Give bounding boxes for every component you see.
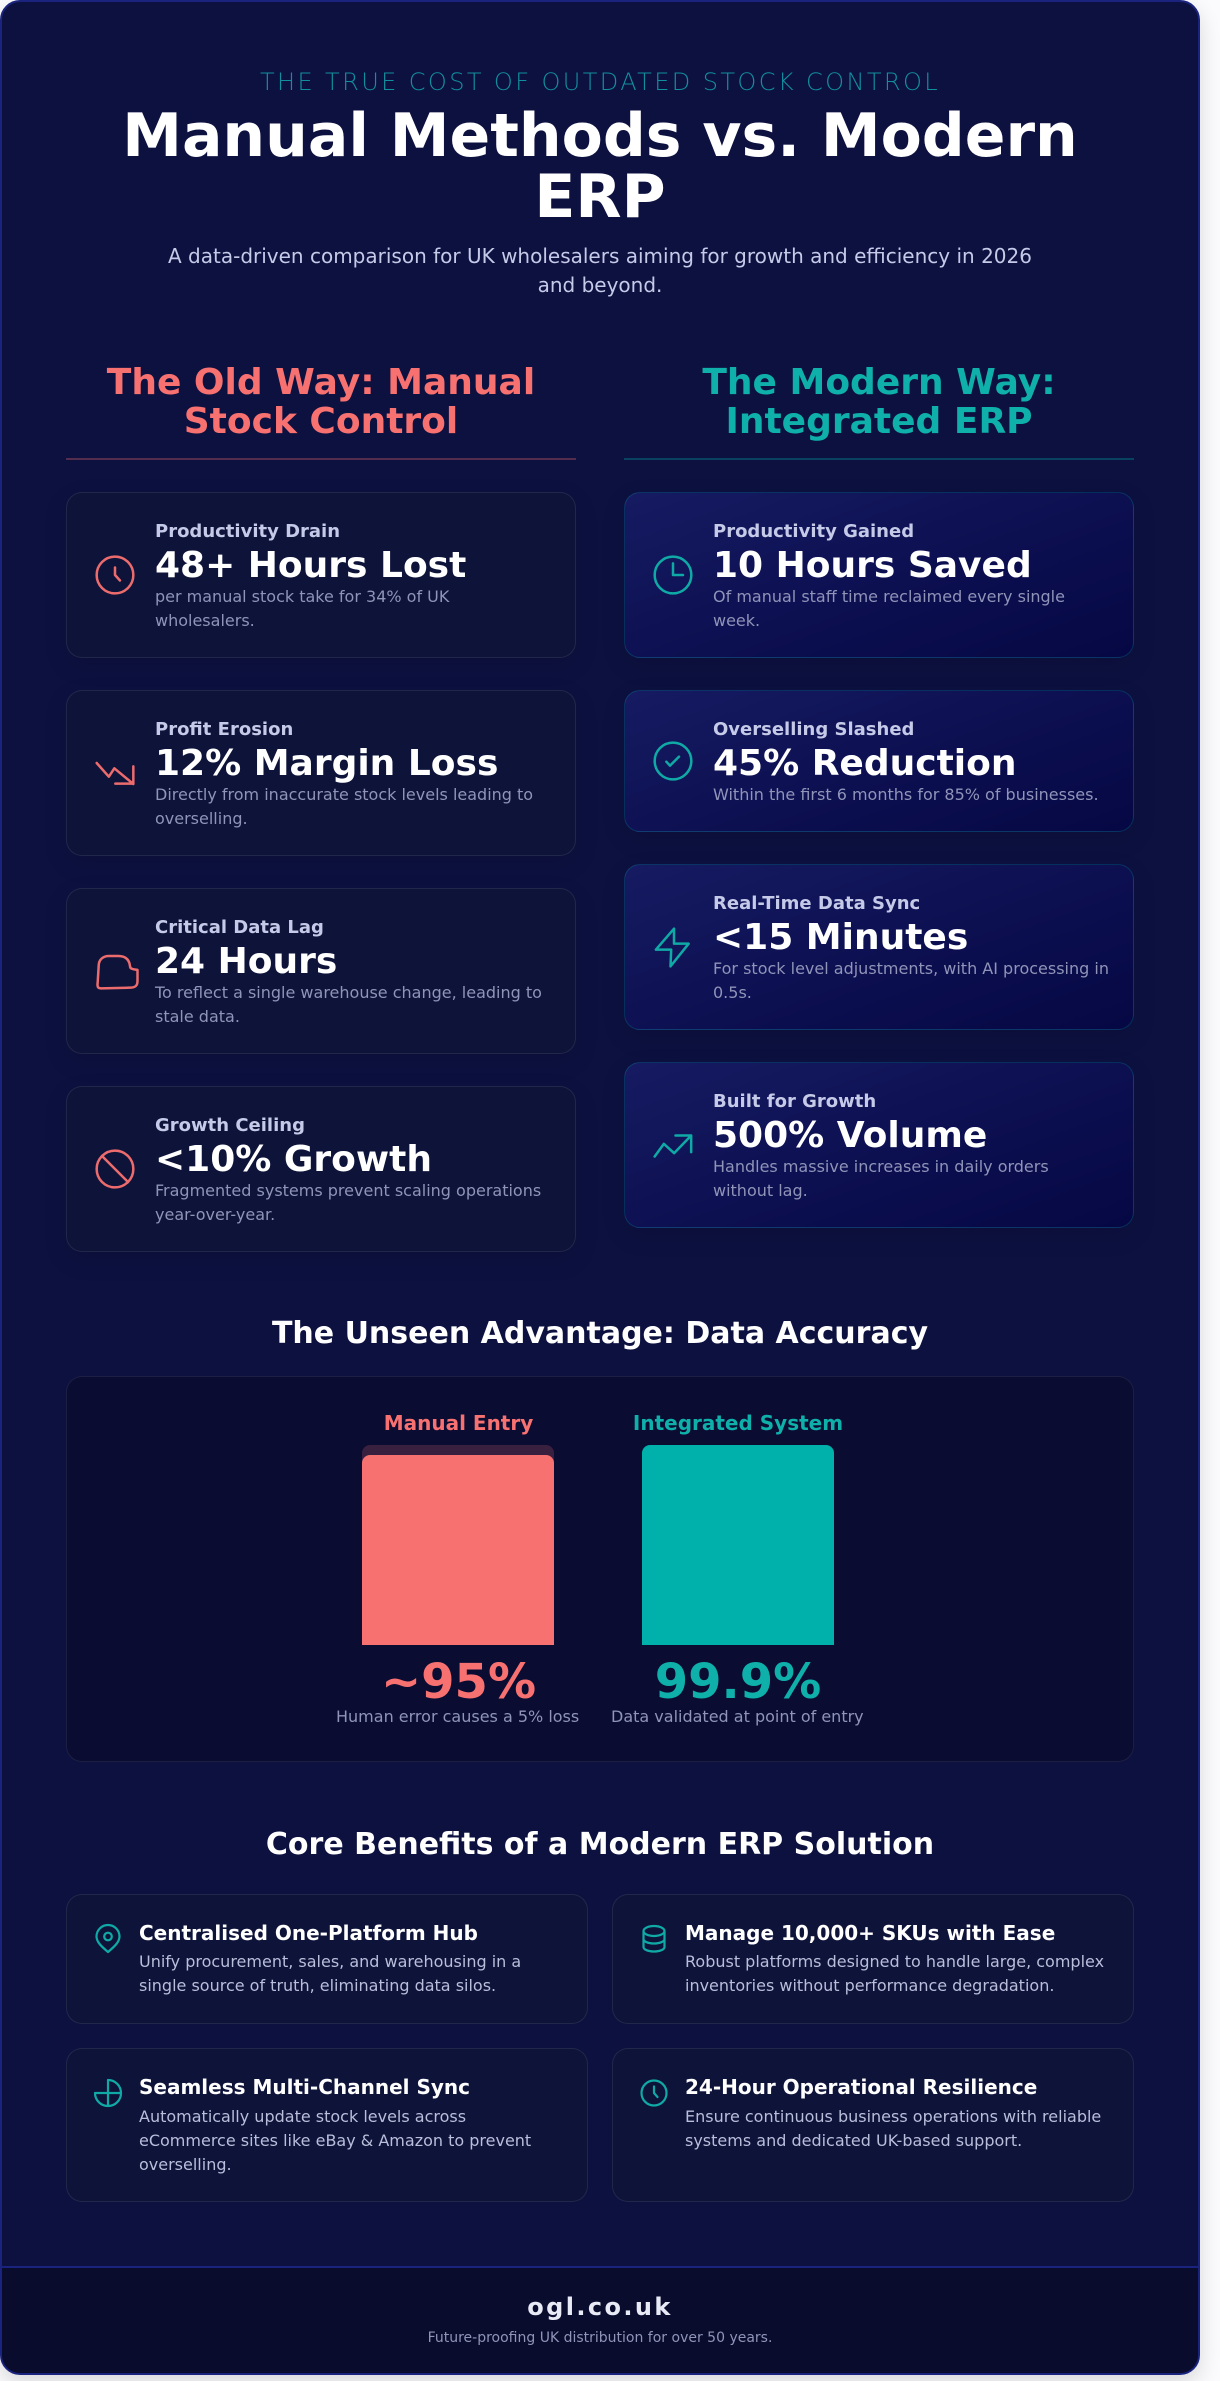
label: Growth Ceiling: [155, 1115, 305, 1136]
section heading: data accuracy: The Unseen Advantage: Data Accuracy: [272, 1316, 928, 1351]
value: 12% Margin Loss: [155, 743, 498, 784]
bar fill: manual entry: [362, 1455, 554, 1645]
label: Real-Time Data Sync: [713, 893, 920, 914]
description: [713, 959, 1109, 1002]
bar: integrated system: [642, 1445, 834, 1645]
benefit description: Unify procurement, sales, and warehousing in a: [139, 1952, 521, 1971]
panel: data accuracy chart: [66, 1376, 1134, 1762]
benefit description: Ensure continuous business operations with reliable: [685, 2107, 1101, 2126]
description: Directly from inaccurate stock levels leading to: [155, 785, 533, 804]
description: Fragmented systems prevent scaling operations: [155, 1181, 541, 1200]
section heading: core benefits: Core Benefits of a Modern ERP Solution: [266, 1827, 934, 1862]
bar track: manual entry: [362, 1445, 554, 1645]
icon: ban: [95, 1149, 135, 1189]
card: growth ceiling: [66, 1086, 576, 1252]
description: Within the first 6 months for 85% of businesses.: [713, 785, 1099, 804]
icon: database: [642, 1924, 666, 1953]
value: 24 Hours: [155, 941, 337, 982]
card: overselling slashed: [624, 690, 1134, 832]
benefit title: Manage 10,000+ SKUs with Ease: [685, 1921, 1055, 1945]
icon: pin: [95, 1924, 121, 1954]
column heading: modern way: The Modern Way:: [702, 362, 1056, 403]
card: critical data lag: [66, 888, 576, 1054]
description: Of manual staff time reclaimed every single: [713, 587, 1065, 606]
value: 48+ Hours Lost: [155, 545, 466, 586]
label: Critical Data Lag: [155, 917, 324, 938]
description: stale data.: [155, 1007, 240, 1026]
bar label: manual entry: Manual Entry: [384, 1411, 533, 1435]
title: Manual Methods vs. Modern: [122, 101, 1078, 171]
footer: [0, 2266, 1200, 2375]
value: manual entry: ~95%: [381, 1654, 536, 1710]
caption: manual entry: Human error causes a 5% loss: [336, 1707, 579, 1726]
benefit description: overselling.: [139, 2155, 232, 2174]
description: [713, 587, 1065, 630]
description: wholesalers.: [155, 611, 255, 630]
description: without lag.: [713, 1181, 808, 1200]
value: 10 Hours Saved: [713, 545, 1032, 586]
header eyebrow: THE TRUE COST OF OUTDATED STOCK CONTROL: [260, 68, 940, 96]
column heading: modern way: [702, 362, 1056, 442]
benefit: 10,000+ SKUs: [612, 1894, 1134, 2024]
icon: trending down: [95, 762, 135, 786]
value: 500% Volume: [713, 1115, 987, 1156]
benefit title: Seamless Multi-Channel Sync: [139, 2075, 470, 2099]
subtitle: A data-driven comparison for UK wholesalers aiming for growth and efficiency in 2026: [168, 244, 1032, 268]
icon: clock: [640, 2079, 668, 2107]
benefit description: Robust platforms designed to handle large, complex: [685, 1952, 1104, 1971]
benefit title: 24-Hour Operational Resilience: [685, 2075, 1037, 2099]
benefit description: [139, 2107, 531, 2174]
benefit description: [685, 1952, 1104, 1995]
icon: blob: [96, 954, 139, 990]
benefit title: Centralised One-Platform Hub: [139, 1921, 478, 1945]
icon: clock: [653, 555, 693, 595]
icon: segmented circle: [94, 2078, 122, 2108]
subtitle: and beyond.: [538, 273, 662, 297]
icon: check circle: [653, 741, 693, 781]
label: Profit Erosion: [155, 719, 293, 740]
icon: bolt: [654, 927, 690, 968]
description: [155, 587, 450, 630]
description: [713, 1157, 1049, 1200]
label: Productivity Gained: [713, 521, 914, 542]
description: To reflect a single warehouse change, leading to: [155, 983, 542, 1002]
benefit description: single source of truth, eliminating data silos.: [139, 1976, 496, 1995]
card: profit erosion: [66, 690, 576, 856]
icon: trending up: [653, 1134, 692, 1158]
description: per manual stock take for 34% of UK: [155, 587, 449, 606]
card: real-time data sync: [624, 864, 1134, 1030]
column heading: old way: Stock Control: [184, 401, 458, 442]
description: [155, 785, 533, 828]
benefit description: eCommerce sites like eBay & Amazon to prevent: [139, 2131, 531, 2150]
footer tagline: Future-proofing UK distribution for over 50 years.: [428, 2330, 772, 2346]
value: <15 Minutes: [713, 917, 968, 958]
value: <10% Growth: [155, 1139, 432, 1180]
card: productivity drain: [66, 492, 576, 658]
column heading: old way: The Old Way: Manual: [107, 362, 535, 403]
description: For stock level adjustments, with AI processing in: [713, 959, 1109, 978]
label: Overselling Slashed: [713, 719, 914, 740]
bar label: integrated system: Integrated System: [633, 1411, 843, 1435]
column heading: modern way: Integrated ERP: [725, 401, 1033, 442]
description: 0.5s.: [713, 983, 752, 1002]
description: Handles massive increases in daily orders: [713, 1157, 1049, 1176]
value: integrated system: 99.9%: [655, 1654, 821, 1710]
benefit description: [685, 2107, 1101, 2150]
description: year-over-year.: [155, 1205, 275, 1224]
icon: clock: [95, 555, 135, 595]
title: [122, 101, 1078, 232]
caption: integrated system: Data validated at point of entry: [611, 1707, 864, 1726]
benefit: multi-channel sync: [66, 2048, 588, 2202]
column heading rule: modern way: [624, 458, 1134, 460]
column heading: old way: [106, 362, 535, 442]
description: week.: [713, 611, 760, 630]
benefit: centralised hub: [66, 1894, 588, 2024]
description: [155, 1181, 541, 1224]
benefit: operational resilience: [612, 2048, 1134, 2202]
card: productivity gained: [624, 492, 1134, 658]
description: overselling.: [155, 809, 248, 828]
benefit description: [139, 1952, 521, 1995]
label: Productivity Drain: [155, 521, 340, 542]
description: [154, 983, 542, 1026]
benefit description: Automatically update stock levels across: [139, 2107, 466, 2126]
benefit description: inventories without performance degradation.: [685, 1976, 1054, 1995]
card: built for growth: [624, 1062, 1134, 1228]
label: Built for Growth: [713, 1091, 876, 1112]
title: ERP: [534, 162, 666, 232]
column heading rule: old way: [66, 458, 576, 460]
value: 45% Reduction: [713, 743, 1016, 784]
benefit description: systems and dedicated UK-based support.: [685, 2131, 1022, 2150]
footer brand: ogl.co.uk: [527, 2293, 673, 2321]
subtitle: [168, 244, 1032, 297]
